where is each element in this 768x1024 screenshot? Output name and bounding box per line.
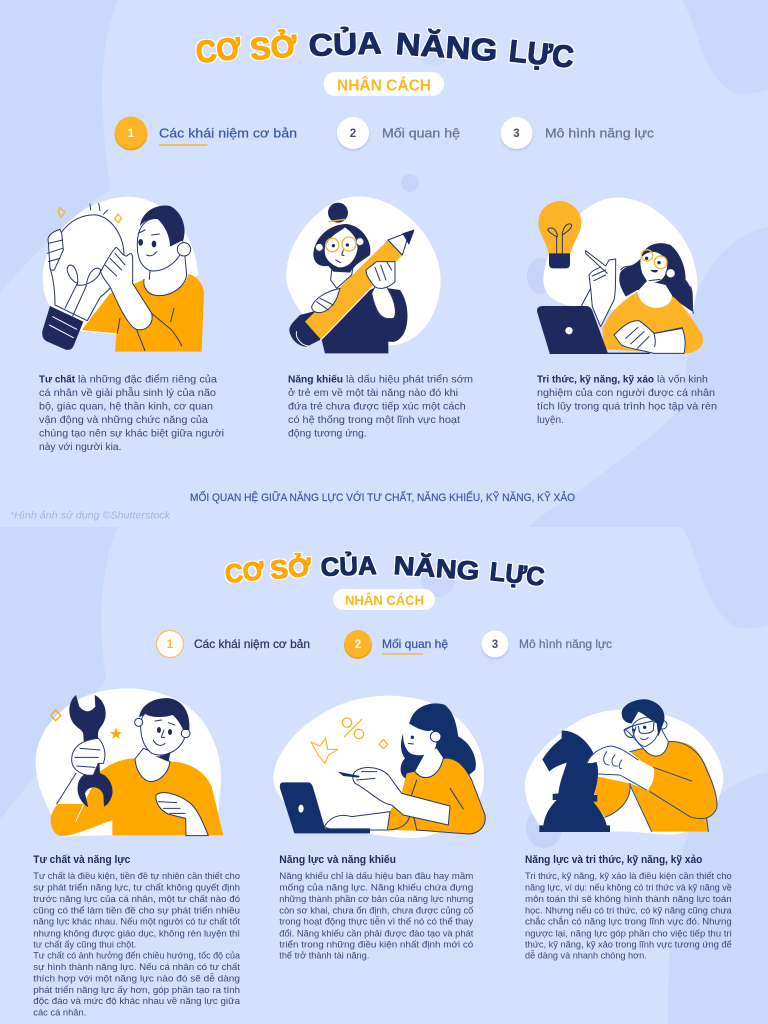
title: bottom panel <box>223 549 546 592</box>
text block: tri thức, kỹ năng, kỹ xảo: nghiệm của con người được cá nhân <box>537 387 715 399</box>
text block: tư chất và năng lực: Tư chất là điều kiện, tiền đề tự nhiên cần thiết cho <box>33 871 240 881</box>
illustration: man moving chess knight <box>525 699 723 835</box>
subtitle pill: top panel: NHÂN CÁCH <box>337 76 431 94</box>
step tabs: bottom panel: 1 <box>167 639 174 651</box>
text block: năng lực và năng khiếu: Năng khiếu chỉ là dấu hiệu ban đầu hay mầm <box>279 871 474 881</box>
text block: năng lực và năng khiếu: mống của năng lực. Năng khiếu chứa đựng <box>279 882 473 892</box>
text block: tư chất và năng lực: phát triển năng lực ấy hơn, góp phần tạo ra tính <box>33 985 240 995</box>
text block: năng lực và năng khiếu: trong hoạt động thực tiễn vì thế nó có thể thay <box>279 917 474 927</box>
heading: tư chất và năng lực: Tư chất và năng lực <box>33 854 130 866</box>
title: top panel: CỦA <box>308 24 382 63</box>
text block: năng khiếu: có hệ thống trong một lĩnh vực hoạt <box>288 414 460 426</box>
text block: năng lực và tri thức, kỹ năng, kỹ xảo: năng lực, ví dụ: nếu không có tri thức và kỹ năng về <box>525 882 732 892</box>
background: top panel <box>0 0 768 527</box>
subtitle pill: bottom panel <box>333 589 435 610</box>
step tabs: top panel: 2 <box>350 128 356 140</box>
heading: năng lực và tri thức, kỹ năng, kỹ xảo: Năng lực và tri thức, kỹ năng, kỹ xảo <box>525 854 703 866</box>
text block: năng lực và năng khiếu: những thành phần cơ bản của năng lực nhưng <box>279 894 473 904</box>
text block: năng lực và tri thức, kỹ năng, kỹ xảo: học. Nhưng nếu có tri thức, có kỹ năng cũng chưa <box>525 905 733 915</box>
text block: năng lực và năng khiếu <box>279 854 474 961</box>
step tabs: top panel: 1 <box>128 128 135 140</box>
step tabs: bottom panel: 2 <box>355 639 361 651</box>
step tabs: top panel: Mô hình năng lực <box>545 126 655 140</box>
title: top panel: NĂNG <box>395 26 499 68</box>
text block: năng lực và năng khiếu: thể trở thành tài năng. <box>279 951 369 961</box>
text block: tư chất và năng lực: năng lực khác nhau. Nếu một người có tư chất tốt <box>33 917 240 927</box>
text block: năng khiếu: là dấu hiệu phát triển sớm <box>346 374 473 386</box>
title: bottom panel: NĂNG <box>393 550 480 586</box>
text block: năng khiếu: ở trẻ em về một tài năng nào đó khi <box>288 387 458 399</box>
text block: năng lực và tri thức, kỹ năng, kỹ xảo: chắc chắn có năng lực trong lĩnh vực đó. Nhưng <box>525 917 732 927</box>
step tabs: bottom panel: 3 <box>492 639 498 651</box>
text block: tư chất và năng lực: nhưng không được giáo dục, không rèn luyện thì <box>33 928 240 938</box>
illustration: woman pointing at light bulb with laptop <box>527 198 703 354</box>
text block: tư chất <box>39 374 224 453</box>
subtitle pill: top panel <box>324 72 444 96</box>
text block: tư chất và năng lực: tư chất ấy cũng thui chột. <box>33 939 136 949</box>
text block: năng lực và tri thức, kỹ năng, kỹ xảo: ngược lại, năng lực góp phần cho việc tiếp thu tri <box>525 928 732 938</box>
step tabs: top panel: Mối quan hệ <box>382 126 460 140</box>
text block: tri thức, kỹ năng, kỹ xảo: Tri thức, kỹ năng, kỹ xảo <box>537 374 654 386</box>
text block: năng lực và tri thức, kỹ năng, kỹ xảo: Tri thức, kỹ năng, kỹ xảo là điều kiện cần thiết cho <box>525 871 732 881</box>
text block: tư chất: Tư chất <box>39 374 76 386</box>
text block: năng lực và năng khiếu: còn sơ khai, chưa ổn định, chưa được củng cố <box>279 905 473 915</box>
background: bottom panel <box>0 527 768 1024</box>
text block: năng lực và tri thức, kỹ năng, kỹ xảo: thức, kỹ năng, kỹ xảo trong lĩnh vực tương ứng để <box>525 939 732 949</box>
heading: năng lực và năng khiếu: Năng lực và năng khiếu <box>279 854 396 866</box>
step tabs: top panel: 3 <box>513 128 520 140</box>
title: bottom panel: LỰC <box>488 556 546 592</box>
title: top panel: SỞ <box>248 27 299 67</box>
text block: tư chất: chúng tạo nên sự khác biệt giữa người <box>39 428 224 440</box>
text block: tư chất và năng lực: sự hình thành năng lực. Nếu cá nhân có tư chất <box>33 962 240 972</box>
text block: năng khiếu: đứa trẻ chưa được tiếp xúc một cách <box>288 400 466 412</box>
text block: năng lực và tri thức, kỹ năng, kỹ xảo <box>525 854 733 961</box>
text block: năng lực và năng khiếu: đổi. Năng khiếu cần phải được đào tạo và phát <box>279 928 474 938</box>
text block: tư chất và năng lực: cũng có thể làm tiền đề cho sự phát triển nhiều <box>33 905 240 915</box>
subtitle pill: bottom panel: NHÂN CÁCH <box>345 593 424 608</box>
text block: tri thức, kỹ năng, kỹ xảo: luyện. <box>537 415 564 426</box>
text block: năng khiếu <box>288 374 473 440</box>
illustration: woman holding pencil <box>286 196 441 353</box>
text block: tư chất và năng lực: độc đáo và mức độ khác nhau về năng lực giữa <box>33 996 241 1006</box>
step tabs: top panel <box>114 116 655 150</box>
step tabs: bottom panel: Mối quan hệ <box>382 637 448 651</box>
illustration: man holding wrench <box>36 689 223 837</box>
text block: tư chất và năng lực: trước năng lực của cá nhân, một tư chất nào đó <box>33 894 240 904</box>
text block: tư chất và năng lực: thích hợp với một năng lực nào đó sẽ dễ dàng <box>33 973 240 983</box>
text block: năng lực và tri thức, kỹ năng, kỹ xảo: dễ dàng và nhanh chóng hơn. <box>525 951 647 961</box>
text block: năng khiếu: Năng khiếu <box>288 374 343 386</box>
footer heading: relationship link: MỐI QUAN HỆ GIỮA NĂNG LỰC VỚI TƯ CHẤT, NĂNG KHIẾU, KỸ NĂNG, KỸ XẢO <box>190 490 575 504</box>
text block: tư chất và năng lực: các cá nhân. <box>33 1007 86 1017</box>
title: top panel: LỰC <box>507 33 576 75</box>
title: top panel <box>194 24 576 75</box>
text block: tư chất: bộ, giác quan, hệ thần kinh, cơ quan <box>39 400 213 412</box>
title: bottom panel: SỞ <box>269 550 313 585</box>
text block: tri thức, kỹ năng, kỹ xảo: là vốn kinh <box>657 374 708 386</box>
title: bottom panel: CỦA <box>320 549 377 582</box>
text block: tri thức, kỹ năng, kỹ xảo <box>537 374 717 426</box>
step tabs: bottom panel: Các khái niệm cơ bản <box>194 637 310 651</box>
image credit: *Hình ảnh sử dụng ©Shutterstock <box>10 510 171 522</box>
text block: tư chất: cá nhân về giải phẫu sinh lý của não <box>39 386 216 399</box>
text block: tri thức, kỹ năng, kỹ xảo: tích lũy trong quá trình học tập và rèn <box>537 402 717 412</box>
step tabs: top panel: Các khái niệm cơ bản <box>159 126 297 140</box>
title: top panel: CƠ <box>194 30 243 70</box>
text block: năng lực và tri thức, kỹ năng, kỹ xảo: môn toán thì sẽ không hình thành năng lực toán <box>525 894 732 904</box>
text block: tư chất và năng lực: Tư chất có ảnh hưởng đến chiều hướng, tốc độ của <box>33 951 241 961</box>
text block: tư chất và năng lực <box>33 854 241 1017</box>
illustration: woman working on laptop <box>273 696 485 838</box>
illustration: man holding light bulb <box>42 197 204 352</box>
text block: năng lực và năng khiếu: triển trong những điều kiện nhất định mới có <box>279 939 473 949</box>
text block: tư chất: vận động và những chức năng của <box>39 414 208 426</box>
step tabs: bottom panel: Mô hình năng lực <box>519 637 612 651</box>
text block: tư chất: này với người kia. <box>39 442 122 453</box>
title: bottom panel: CƠ <box>223 555 266 589</box>
text block: năng khiếu: động tương ứng. <box>288 428 367 440</box>
step tabs: bottom panel <box>156 630 612 659</box>
text block: tư chất: là những đặc điểm riêng của <box>78 374 217 386</box>
text block: tư chất và năng lực: sự phát triển năng lực, tư chất không quyết định <box>33 882 240 892</box>
